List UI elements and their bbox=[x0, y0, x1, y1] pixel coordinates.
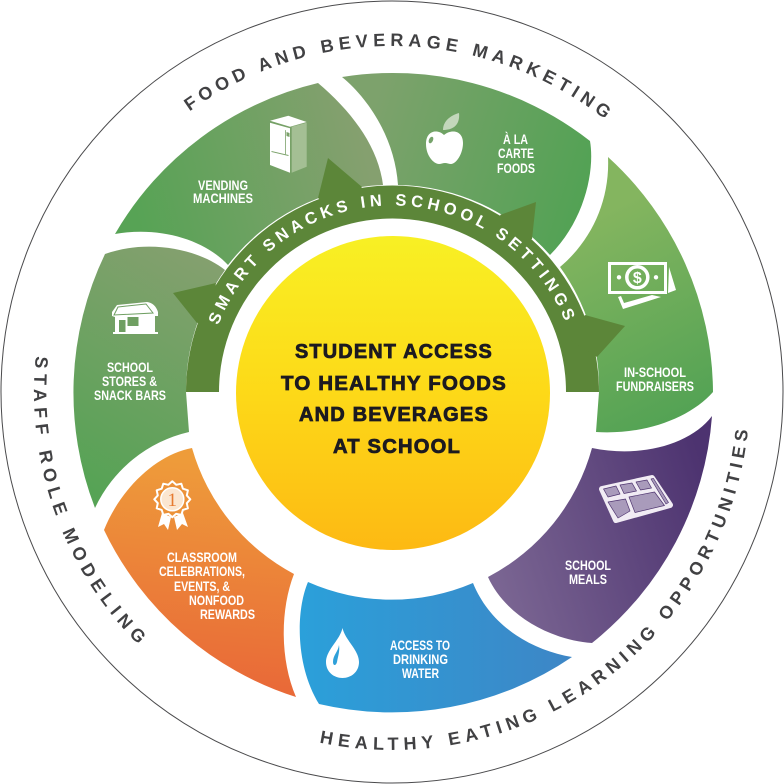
label: classroom celebrations, events and nonfood rewards: EVENTS, & bbox=[174, 578, 230, 594]
label: school meals: SCHOOL bbox=[565, 557, 611, 573]
label: access to drinking water: DRINKING bbox=[393, 651, 448, 667]
heading: healthy eating learning opportunities: HEALTHY EATING LEARNING OPPORTUNITIES bbox=[320, 430, 748, 750]
label: school meals bbox=[565, 557, 611, 587]
icon: lunch tray bbox=[602, 478, 670, 520]
label: in-school fundraisers: IN-SCHOOL bbox=[624, 364, 686, 380]
panel: a la carte foods bbox=[342, 73, 591, 255]
icon: vending machine bbox=[270, 116, 307, 173]
label: school stores and snack bars: SCHOOL bbox=[107, 359, 153, 375]
label: school meals: MEALS bbox=[569, 571, 607, 587]
icon: money: $ bbox=[633, 270, 642, 287]
panel: access to drinking water bbox=[300, 582, 572, 712]
banner: smart snacks in school settings bbox=[173, 158, 625, 392]
label: access to drinking water: WATER bbox=[402, 665, 439, 681]
panel: school stores and snack bars bbox=[73, 247, 225, 508]
center title: STUDENT ACCESS bbox=[295, 340, 493, 363]
panel: vending machines bbox=[115, 83, 383, 265]
panel: in-school fundraisers bbox=[560, 157, 713, 432]
label: access to drinking water bbox=[390, 637, 450, 681]
center title: TO HEALTHY FOODS bbox=[281, 372, 507, 395]
label: classroom celebrations, events and nonfood rewards bbox=[159, 549, 255, 622]
center title bbox=[281, 340, 507, 458]
icon: school store bbox=[112, 302, 158, 334]
heading: food and beverage marketing: FOOD AND BEVERAGE MARKETING bbox=[184, 34, 610, 117]
label: vending machines: MACHINES bbox=[193, 190, 253, 206]
banner: smart snacks in school settings: SMART SNACKS IN SCHOOL SETTINGS bbox=[209, 194, 574, 324]
label: classroom celebrations, events and nonfood rewards: CLASSROOM bbox=[167, 549, 237, 565]
center title: AND BEVERAGES bbox=[299, 403, 489, 426]
label: a la carte foods bbox=[497, 131, 535, 176]
icon: money bbox=[610, 264, 676, 309]
icon: apple bbox=[426, 113, 463, 164]
label: in-school fundraisers bbox=[616, 364, 694, 394]
label: vending machines: VENDING bbox=[198, 177, 248, 193]
center title: AT SCHOOL bbox=[333, 435, 461, 458]
label: school stores and snack bars: STORES & bbox=[102, 373, 157, 389]
panel: classroom celebrations, events and nonfood rewards bbox=[104, 448, 296, 697]
heading: staff role modeling: STAFF ROLE MODELING bbox=[34, 356, 144, 642]
label: in-school fundraisers: FUNDRAISERS bbox=[616, 378, 694, 394]
center circle: student access bbox=[236, 236, 550, 550]
label: a la carte foods: À LA bbox=[503, 131, 528, 147]
icon: water drop bbox=[326, 628, 359, 678]
label: a la carte foods: CARTE bbox=[498, 145, 534, 161]
label: classroom celebrations, events and nonfood rewards: NONFOOD bbox=[189, 592, 244, 608]
icon: award ribbon: 1 bbox=[168, 490, 177, 511]
label: a la carte foods: FOODS bbox=[497, 160, 535, 176]
icon: award ribbon bbox=[154, 481, 190, 530]
label: vending machines bbox=[193, 177, 253, 206]
panel: school meals bbox=[488, 416, 712, 643]
label: classroom celebrations, events and nonfood rewards: CELEBRATIONS, bbox=[159, 563, 245, 579]
label: school stores and snack bars: SNACK BARS bbox=[94, 387, 166, 403]
label: school stores and snack bars bbox=[94, 359, 166, 403]
label: access to drinking water: ACCESS TO bbox=[390, 637, 450, 653]
label: classroom celebrations, events and nonfood rewards: REWARDS bbox=[200, 606, 255, 622]
